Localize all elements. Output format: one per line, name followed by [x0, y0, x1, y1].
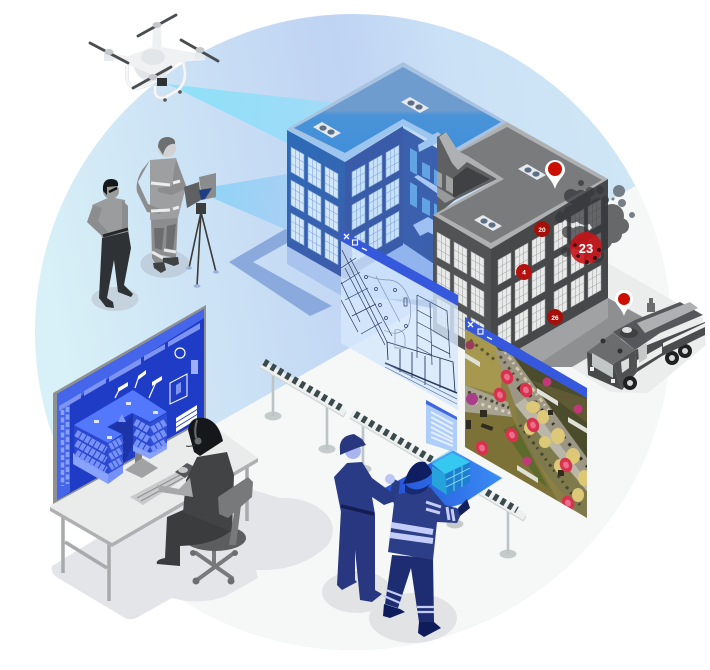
fire scene ground pad [567, 263, 706, 393]
rooftop band [495, 350, 587, 472]
cab side [613, 350, 637, 390]
headset [195, 420, 197, 438]
tablet [380, 449, 503, 520]
floor plan screen [341, 230, 458, 410]
propeller: left [90, 43, 128, 63]
incident marker 26: 26 [551, 315, 559, 322]
smoke puffs [612, 185, 635, 218]
walls [74, 425, 108, 474]
desk edge [50, 458, 258, 547]
photo labels [465, 353, 588, 483]
propeller: right [181, 40, 218, 61]
cap [340, 434, 366, 455]
left rooftop band [465, 385, 512, 417]
drone [90, 15, 218, 102]
fire truck [587, 298, 705, 390]
truck body side [635, 322, 705, 372]
seat [184, 525, 246, 551]
incident marker 4: 4 [522, 270, 526, 276]
legs [99, 230, 133, 308]
jacket [388, 487, 463, 560]
plinth [491, 298, 608, 380]
body plate [108, 46, 205, 76]
porch [413, 217, 440, 238]
smoke cloud [555, 180, 629, 263]
desk shadow [52, 486, 333, 619]
road beside building [535, 298, 650, 367]
wheels rear [665, 351, 679, 365]
incident marker 26 [547, 309, 563, 325]
right arm [122, 200, 128, 232]
aerial photo screen [465, 317, 590, 520]
boots [383, 604, 441, 637]
cab front [587, 352, 622, 390]
monitor building windows [76, 422, 166, 470]
incident marker 20: 20 [538, 227, 546, 234]
scanner right [199, 173, 216, 200]
incident marker 23: 23 [579, 241, 593, 256]
photo pins [500, 370, 514, 384]
left wall [287, 130, 345, 279]
shadow [92, 287, 138, 311]
drone camera beam [167, 84, 507, 143]
torso [183, 452, 234, 532]
arm left [137, 160, 162, 214]
leg stripes [384, 590, 434, 612]
monitor 3d building [73, 390, 167, 484]
arm right [158, 160, 187, 195]
tripod head [196, 203, 206, 214]
gable wall [437, 132, 497, 215]
lower band with houses [515, 405, 590, 520]
roof [433, 122, 608, 249]
grey road [515, 398, 587, 492]
photo window controls [468, 322, 473, 327]
white stripes [637, 346, 662, 368]
feet [163, 98, 167, 102]
propeller: top [138, 15, 176, 36]
windows right wall A [498, 233, 545, 351]
dome [141, 49, 165, 65]
legs [157, 510, 232, 566]
photo title bar [465, 317, 587, 398]
right wall [345, 126, 403, 279]
jacket stripes [390, 525, 433, 541]
front wheel [623, 376, 637, 390]
lower left ground [465, 412, 560, 505]
mini plan [170, 374, 187, 404]
wing ledge [414, 175, 438, 194]
plinth blue [287, 245, 345, 298]
belt [103, 229, 128, 236]
grey firefighter [137, 137, 190, 278]
desk legs [63, 465, 247, 601]
roof vents [313, 97, 546, 231]
dark items [466, 385, 564, 476]
barrier tape left [262, 362, 345, 415]
cab window [621, 358, 629, 373]
grey police officer [87, 179, 138, 311]
rooftop clutter [468, 340, 590, 505]
side grid [62, 407, 68, 486]
lower body [133, 63, 175, 82]
hand [385, 474, 395, 484]
tripod [189, 212, 216, 286]
plan drawing [341, 250, 457, 404]
rear wing windows [410, 148, 437, 220]
ladder [637, 302, 698, 333]
blue firefighter [369, 462, 470, 643]
barrier tape right [351, 414, 525, 519]
plan title bar [341, 230, 458, 306]
left panel [57, 309, 204, 500]
photo [465, 320, 590, 520]
desk [50, 420, 258, 601]
torso and arms [334, 462, 400, 514]
glove [458, 499, 470, 516]
incident marker 20 [534, 221, 550, 237]
left wall [433, 214, 491, 365]
frame [53, 305, 206, 504]
hatch [620, 328, 638, 338]
headlights [590, 367, 594, 371]
head [158, 139, 176, 157]
jacket stripes [151, 181, 180, 211]
houses [524, 401, 590, 502]
legs [337, 510, 382, 602]
document panel above tablet [426, 400, 457, 453]
cab roof [587, 333, 635, 364]
windows left wall [437, 232, 484, 350]
callouts [115, 376, 156, 398]
menu bars [59, 323, 200, 411]
screen [57, 309, 204, 500]
mouse pad [175, 463, 197, 478]
ground outline of building [229, 228, 332, 316]
arm [157, 478, 193, 497]
monitor stand [125, 448, 158, 478]
windows left wall [291, 147, 338, 265]
truck top [613, 302, 703, 350]
tablet building glow [430, 449, 470, 478]
hair [103, 179, 118, 195]
pants [151, 214, 178, 266]
dark green strip [495, 345, 590, 462]
incident marker 4 [516, 264, 532, 280]
casters [190, 550, 238, 584]
seated operator [157, 418, 253, 584]
scanner left [184, 182, 201, 208]
incident marker 23 [570, 232, 602, 264]
torso [92, 197, 127, 238]
hair [188, 418, 223, 456]
monitor roof vents [94, 402, 158, 439]
monitor building roof [74, 390, 167, 443]
roof [287, 62, 507, 160]
courtyard [453, 167, 490, 198]
blue police officer [322, 434, 400, 613]
circle icon [175, 348, 185, 358]
boots [153, 257, 179, 273]
shadow [322, 571, 392, 613]
right wall [491, 179, 608, 365]
hat [403, 462, 432, 484]
belt [341, 506, 374, 514]
monitor [53, 305, 206, 504]
shadow [369, 593, 457, 643]
keyboard [130, 472, 185, 505]
arm to top motor [152, 28, 162, 52]
jacket [150, 158, 186, 220]
map pin: truck [615, 290, 633, 316]
scanner beam [205, 174, 287, 230]
legs [385, 555, 434, 622]
windows right wall [352, 145, 399, 263]
plan window controls [344, 234, 349, 239]
hydrant [647, 298, 655, 312]
building: blue digital twin half [287, 62, 507, 310]
building: grey burning half [433, 122, 608, 380]
mini list [191, 360, 198, 374]
propeller: front [133, 67, 171, 88]
map pin: roof [545, 160, 565, 189]
camera [157, 78, 167, 86]
shadow [140, 250, 190, 278]
desk top [50, 420, 258, 543]
plan body [341, 240, 458, 410]
chair back [218, 477, 253, 545]
windows right wall B [554, 199, 601, 317]
barrier posts [264, 372, 516, 558]
hair [158, 137, 175, 155]
landing gear [127, 60, 185, 98]
sunglasses [109, 188, 117, 192]
windshield [592, 353, 613, 378]
head [103, 183, 119, 199]
rear blue wing [345, 128, 440, 310]
3D scanner on tripod [184, 173, 219, 288]
left arm [87, 205, 108, 238]
floor [184, 186, 669, 650]
chair base [196, 545, 234, 580]
pant stripes [152, 250, 176, 258]
base bands [73, 453, 108, 484]
head [345, 443, 361, 459]
